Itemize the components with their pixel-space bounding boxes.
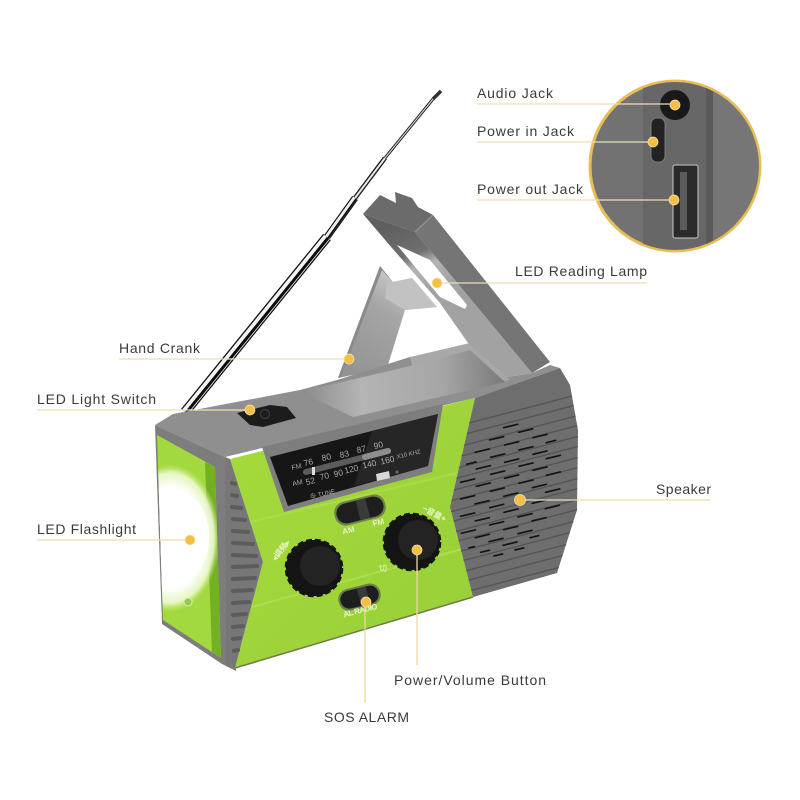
lamp long side (415, 215, 550, 373)
AM scale: 52 (305, 475, 316, 487)
FM scale: 76 (303, 456, 314, 468)
speaker holes (461, 424, 560, 556)
FM scale: 87 (356, 443, 367, 455)
left tuning knob: ◂调频▸ (269, 537, 293, 563)
AM scale: 70 (319, 470, 330, 482)
callout: SOS alarm: SOS ALARM (324, 709, 409, 725)
callout: speaker: Speaker (656, 481, 711, 497)
callout: SOS alarm (324, 597, 409, 725)
callout: power out jack: Power out Jack (477, 181, 584, 197)
audio jack socket (660, 90, 690, 120)
AM scale: X10 KHZ (396, 449, 422, 461)
upper highlight streak (250, 470, 470, 522)
AM scale: 140 (361, 458, 378, 471)
battery indicator (376, 471, 390, 481)
AM scale: AM (292, 479, 304, 488)
callout: speaker (514, 481, 711, 506)
side stripe (205, 462, 221, 658)
LED light switch button (237, 405, 296, 427)
FM scale: FM (291, 463, 303, 472)
power volume knob (379, 503, 448, 573)
AM scale: 160 (379, 454, 396, 467)
callout: power in jack: Power in Jack (477, 123, 575, 139)
flashlight beam (158, 465, 218, 611)
callout: audio jack (477, 85, 680, 110)
left grille (225, 457, 263, 668)
callout: LED light switch: LED Light Switch (37, 391, 156, 407)
inset: jack detail (590, 80, 763, 255)
solar panel plate (410, 343, 510, 395)
FM scale (291, 439, 384, 472)
callout: LED flashlight (37, 521, 195, 545)
AM scale (292, 449, 422, 488)
tuning bar (306, 451, 388, 472)
flashlight lens (160, 496, 209, 575)
callout: LED reading lamp: LED Reading Lamp (515, 263, 647, 279)
display screen (270, 414, 438, 506)
tune label: ⊕ TUNE (309, 487, 337, 501)
callout: hand crank: Hand Crank (119, 340, 201, 356)
display bezel (262, 404, 443, 512)
callout: LED light switch (37, 391, 255, 415)
AM FM switch: AM (341, 525, 356, 536)
tuning bar bright end (365, 451, 388, 457)
SOS alarm switch (336, 581, 383, 619)
callout: audio jack: Audio Jack (477, 85, 554, 101)
callout: hand crank (119, 340, 354, 364)
SOS alarm switch: AL RADIO (342, 602, 378, 619)
radio front green face (230, 398, 475, 668)
callout: power volume button (394, 545, 546, 688)
FM scale: 83 (339, 448, 350, 460)
power volume knob: −音量+ (421, 503, 448, 524)
power out USB socket (673, 165, 698, 238)
AM scale: 90 (333, 467, 344, 479)
LED reading lamp lid (363, 192, 550, 377)
callout: power volume button: Power/Volume Button (394, 672, 546, 688)
FM scale: 80 (321, 451, 332, 463)
small lens icon (184, 598, 192, 606)
inset vertical bands (643, 80, 707, 255)
power in socket (651, 118, 665, 162)
left green flashlight face (157, 435, 221, 658)
left tuning knob (269, 537, 342, 596)
lamp window (397, 245, 467, 309)
AM scale: 120 (343, 463, 360, 476)
tuning needle (312, 467, 315, 475)
left grey shell (155, 425, 236, 671)
lamp underside panel (363, 214, 532, 377)
lower highlight streak (252, 549, 462, 607)
AM FM switch (332, 492, 388, 536)
lamp edge highlight (415, 215, 433, 232)
display reflection (354, 414, 438, 486)
indicator light (395, 470, 399, 474)
radio top face (155, 345, 560, 457)
radio dial display (262, 404, 443, 512)
callout: power out jack (477, 181, 679, 205)
fold-out hand crank stand (338, 266, 437, 378)
callout: power in jack (477, 123, 658, 147)
antenna (185, 91, 441, 413)
lamp top cap (363, 192, 433, 232)
callout: LED flashlight: LED Flashlight (37, 521, 136, 537)
power volume knob: 切 (379, 564, 387, 573)
solar panel recess (300, 350, 505, 417)
AM FM switch: FM (372, 517, 385, 528)
FM scale: 90 (373, 439, 384, 451)
callout: LED reading lamp (432, 263, 647, 288)
speaker grille (450, 368, 580, 617)
